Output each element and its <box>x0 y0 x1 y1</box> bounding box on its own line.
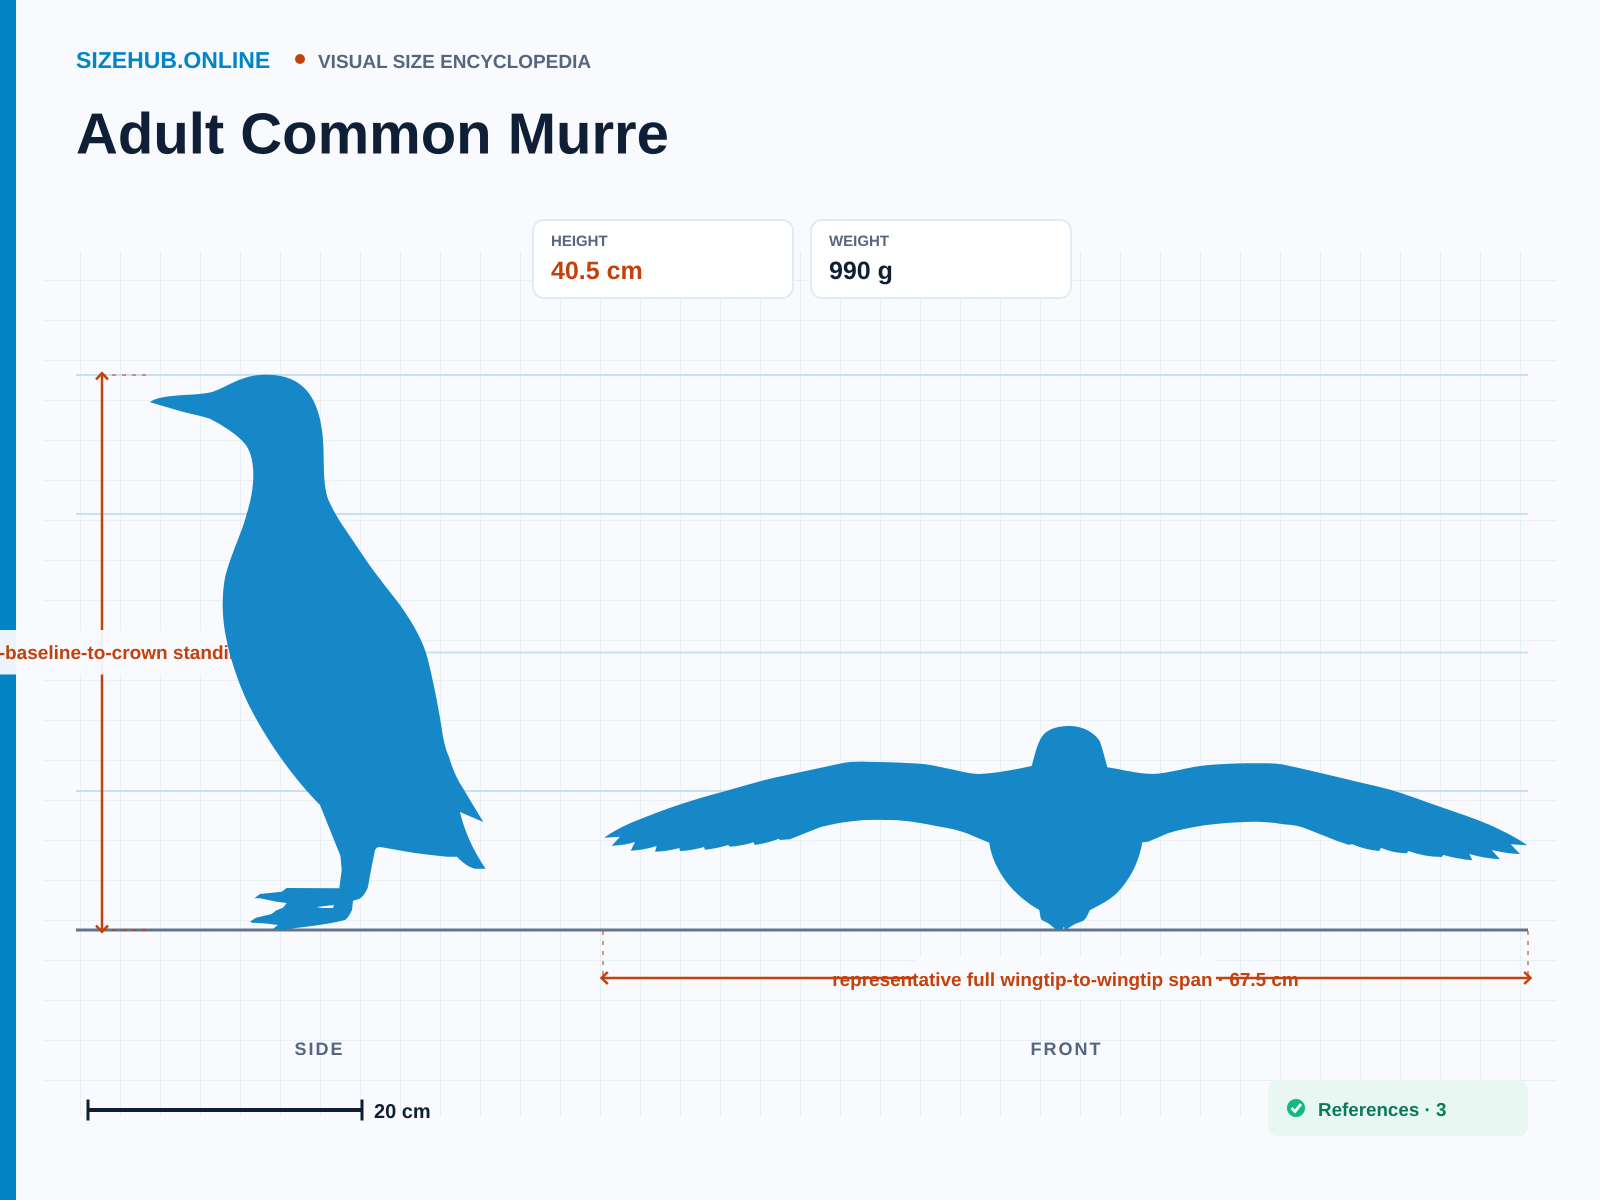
card: weight <box>811 220 1071 298</box>
wingspan label <box>832 956 1299 1000</box>
height label <box>0 630 401 674</box>
accent bar <box>0 0 16 1200</box>
side silhouette of murre <box>150 375 486 929</box>
scale bar <box>88 1100 431 1123</box>
scale bar: 20 cm <box>374 1101 431 1123</box>
references badge: References · 3 <box>1318 1099 1446 1120</box>
card: weight: WEIGHT <box>829 233 889 250</box>
card: height: HEIGHT <box>551 233 608 250</box>
title: Adult Common Murre <box>76 102 669 166</box>
brand separator dot <box>295 54 305 64</box>
side view label: SIDE <box>294 1039 345 1059</box>
height dimension arrow <box>96 373 146 932</box>
baseline <box>76 928 1528 932</box>
card: weight: 990 g <box>829 257 893 285</box>
front view label: FRONT <box>1030 1039 1102 1059</box>
wingspan label: representative full wingtip-to-wingtip span · 67.5 cm <box>832 970 1299 991</box>
wingspan dimension arrow <box>602 931 1530 984</box>
background grid <box>44 252 1556 1116</box>
reference height lines <box>76 375 1528 791</box>
card: height: 40.5 cm <box>551 257 643 285</box>
tagline: VISUAL SIZE ENCYCLOPEDIA <box>318 52 591 73</box>
brand name: SIZEHUB.ONLINE <box>76 47 270 73</box>
card: height <box>533 220 793 298</box>
front silhouette of murre with wings spread <box>604 726 1527 930</box>
references badge <box>1268 1080 1528 1136</box>
